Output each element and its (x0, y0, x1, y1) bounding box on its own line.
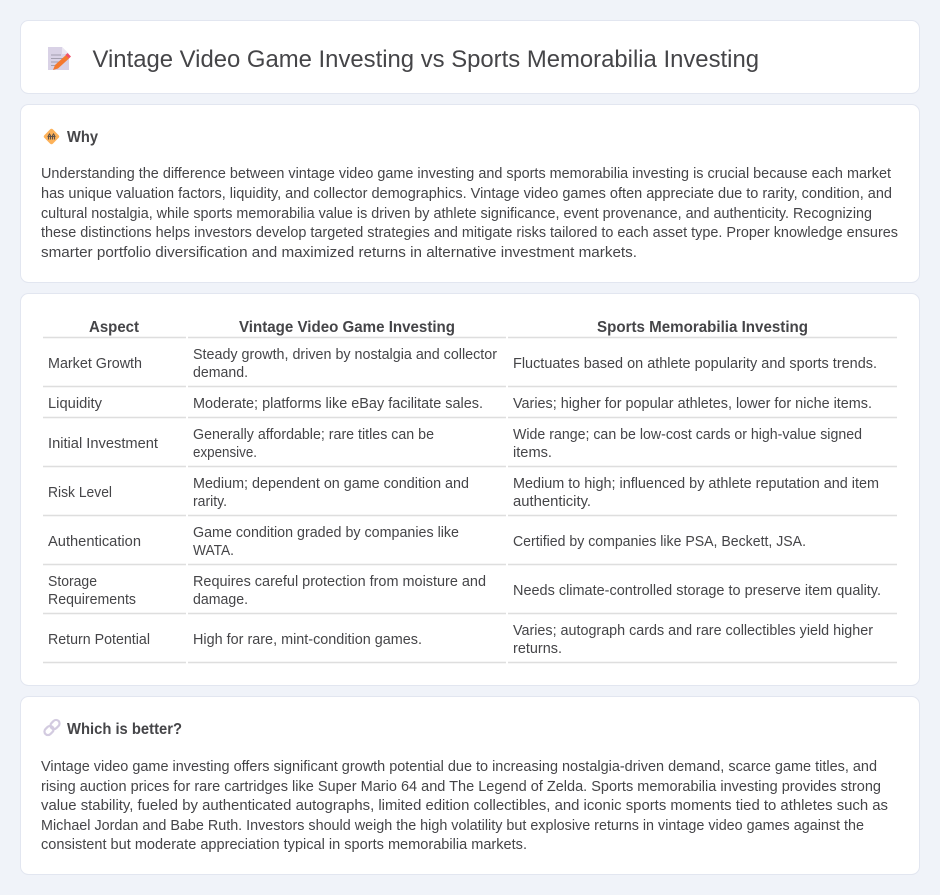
row: return potential: Return Potential (48, 632, 150, 648)
row: risk level: Medium; dependent on game condition and (193, 476, 469, 492)
row: market growth: demand. (193, 365, 248, 381)
row: liquidity: Moderate; platforms like eBay facilitate sales. (193, 396, 483, 412)
row: storage requirements: Needs climate-controlled storage to preserve item quality. (513, 583, 881, 599)
row: return potential (48, 623, 873, 657)
text block: which is better paragraph: value stability, fueled by authenticated autographs, limited edition collectibles, and iconic sports moments tied to athletes such as (41, 798, 888, 814)
icon: document with pencil (48, 47, 71, 70)
row: storage requirements (48, 574, 881, 608)
text block: which is better paragraph: Vintage video game investing offers significant growth potential due to increasing nostalgia-driven demand, scarce game titles, and (41, 759, 877, 775)
heading: which is better: Which is better? (67, 721, 182, 738)
heading: why: Why (67, 129, 98, 146)
row: authentication: Certified by companies like PSA, Beckett, JSA. (513, 534, 806, 550)
row: risk level (48, 476, 879, 510)
text block: why paragraph: smarter portfolio diversification and maximized returns in alternative investment markets. (41, 245, 637, 261)
panel: comparison table (20, 294, 920, 686)
text block: which is better paragraph: consistent but moderate appreciation typical in sports memorabilia markets. (41, 837, 527, 853)
table header row (89, 319, 808, 336)
table header row: Vintage Video Game Investing (239, 319, 455, 336)
text block: why paragraph: these distinctions helps investors develop targeted strategies and mitigate risks tailored to each asset type. Proper knowledge ensures (41, 225, 898, 241)
row: market growth: Fluctuates based on athlete popularity and sports trends. (513, 356, 877, 372)
table header row: Aspect (89, 319, 140, 336)
row: authentication: WATA. (193, 543, 234, 559)
row: market growth: Steady growth, driven by nostalgia and collector (193, 347, 497, 363)
row: risk level: rarity. (193, 494, 227, 510)
row: initial investment: Generally affordable; rare titles can be (193, 427, 434, 443)
row: liquidity: Liquidity (48, 396, 103, 412)
panel: which is better (20, 696, 920, 874)
row: storage requirements: damage. (193, 592, 248, 608)
row: market growth: Market Growth (48, 356, 142, 372)
row: risk level: authenticity. (513, 494, 591, 510)
icon: road sign diamond (43, 128, 60, 145)
row: authentication: Authentication (48, 534, 141, 550)
row: storage requirements: Requires careful protection from moisture and (193, 574, 486, 590)
icon: chain link (43, 718, 61, 737)
table header row: Sports Memorabilia Investing (597, 319, 808, 336)
row: authentication: Game condition graded by companies like (193, 525, 459, 541)
row: initial investment (48, 427, 862, 461)
row: market growth (48, 347, 877, 381)
row: initial investment: expensive. (193, 445, 257, 461)
text block: which is better paragraph: rising auction prices for rare cartridges like Super Mario 64 and The Legend of Zelda. Sports memorabilia investing provides strong (41, 779, 881, 795)
row: initial investment: Initial Investment (48, 436, 158, 452)
row: return potential: Varies; autograph cards and rare collectibles yield higher (513, 623, 873, 639)
row: storage requirements: Requirements (48, 592, 136, 608)
row: initial investment: items. (513, 445, 552, 461)
text block: which is better paragraph (41, 759, 888, 853)
row: storage requirements: Storage (48, 574, 97, 590)
text block: why paragraph (41, 166, 898, 261)
row: liquidity (48, 396, 872, 412)
text block: why paragraph: has unique valuation factors, liquidity, and collector demographics. Vintage video games often appreciate due to rarity, condition, and (41, 186, 892, 202)
title: Vintage Video Game Investing vs Sports Memorabilia Investing (92, 46, 759, 73)
row: return potential: High for rare, mint-condition games. (193, 632, 422, 648)
row: risk level: Risk Level (48, 485, 112, 501)
row: liquidity: Varies; higher for popular athletes, lower for niche items. (513, 396, 872, 412)
row: authentication (48, 525, 806, 559)
row: return potential: returns. (513, 641, 562, 657)
row: initial investment: Wide range; can be low-cost cards or high-value signed (513, 427, 862, 443)
text block: which is better paragraph: Michael Jordan and Babe Ruth. Investors should weigh the high volatility but explosive returns in vintage video games against the (41, 818, 864, 834)
text block: why paragraph: Understanding the difference between vintage video game investing and sports memorabilia investing is crucial because each market (41, 166, 891, 182)
panel: why (20, 104, 920, 282)
row: risk level: Medium to high; influenced by athlete reputation and item (513, 476, 879, 492)
text block: why paragraph: cultural nostalgia, while sports memorabilia value is driven by athlete significance, event provenance, and authenticity. Recognizing (41, 206, 872, 222)
panel: header (20, 20, 920, 94)
